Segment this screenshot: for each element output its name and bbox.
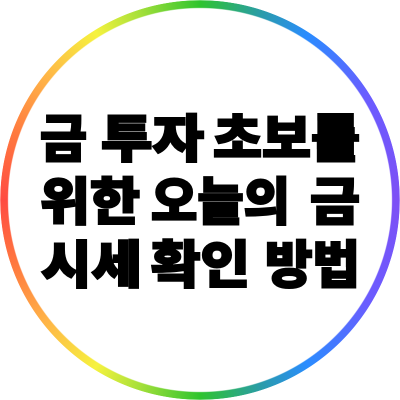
title line 2 <box>40 174 360 231</box>
title line 2: 오늘의 <box>151 174 290 231</box>
title line 1 <box>40 111 360 168</box>
title line 1: 금 <box>40 111 87 168</box>
title line 3 <box>41 237 360 294</box>
title line 2: 금 <box>310 174 360 231</box>
title line 2: 위한 <box>40 174 140 231</box>
title line 3: 확인 <box>151 237 250 294</box>
title line 3: 방법 <box>265 237 360 294</box>
title line 3: 시세 <box>41 237 142 294</box>
title line 1: 초보를 <box>213 111 360 168</box>
title line 1: 투자 <box>101 111 204 168</box>
